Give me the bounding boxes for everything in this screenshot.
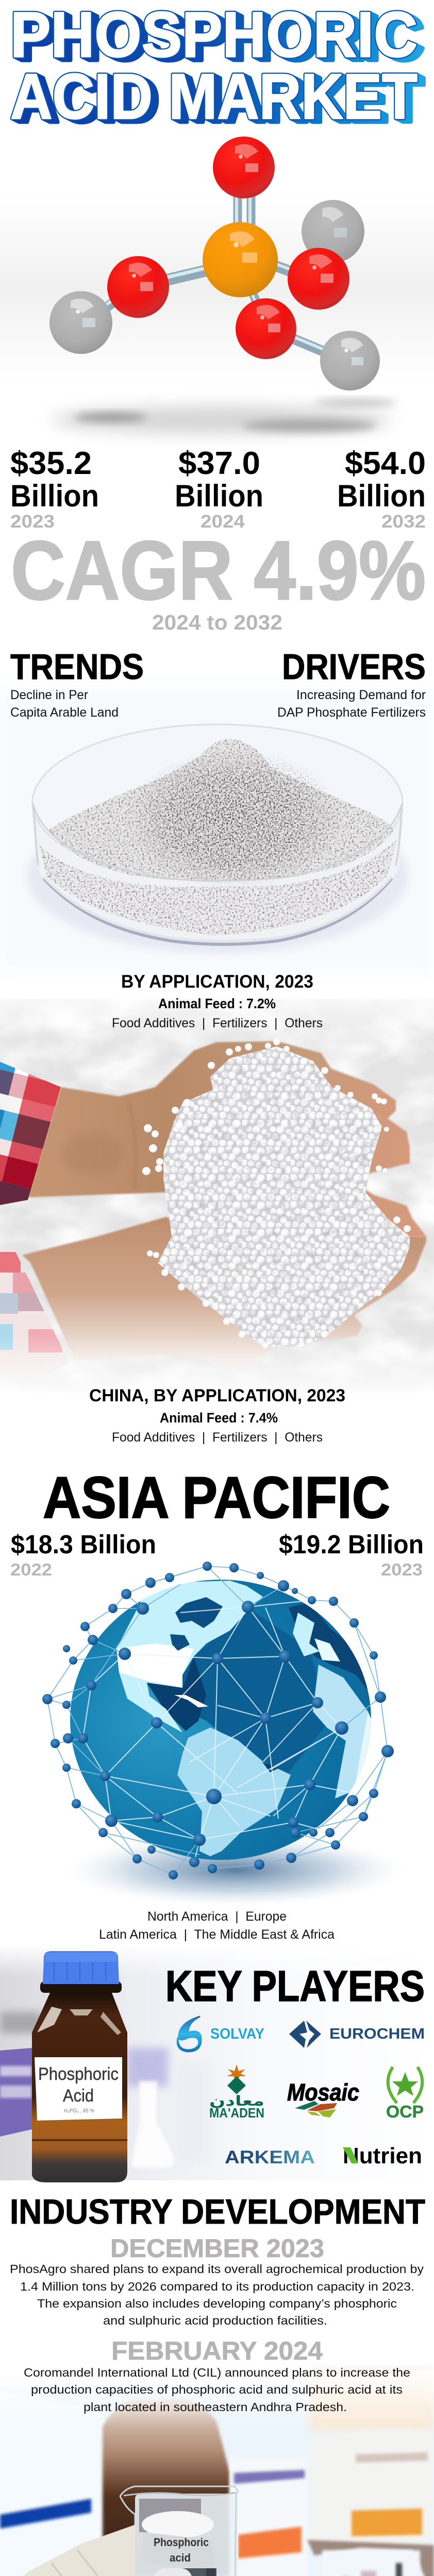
ocean sphere: [70, 1580, 371, 1860]
hydrogen bottom right: [320, 331, 380, 391]
development: february 2024: plant located in southeastern Andhra Pradesh.: [84, 2400, 347, 2414]
other regions list: [99, 1909, 335, 1942]
lower sleeve: [0, 1248, 69, 1366]
molecule shadow: [52, 399, 397, 433]
brown patch below right bottle: [307, 2540, 434, 2576]
market value 2024: $37.0: [178, 446, 260, 481]
soft background band behind molecule: [0, 196, 434, 381]
by application heading: BY APPLICATION, 2023: [121, 972, 313, 992]
soft blue tint behind dish: [0, 685, 434, 974]
development: december 2023: [10, 2234, 424, 2327]
by application heading: Food Additives | Fertilizers | Others: [112, 1016, 323, 1030]
powder mound: [49, 739, 394, 881]
photo background: [0, 999, 434, 1393]
key players lab photo: [0, 1945, 434, 2182]
beaker: Phosphoric: [154, 2536, 209, 2549]
market value 2024: [175, 446, 263, 532]
asia pacific 2023 value: [279, 1530, 424, 1579]
caribbean: [174, 1695, 208, 1707]
title: PHOSPHORIC: [10, 0, 418, 71]
market value 2023: 2023: [10, 512, 55, 532]
china by application heading: CHINA, BY APPLICATION, 2023: [89, 1386, 345, 1405]
beaker: acid: [170, 2551, 191, 2564]
bottle label: H₃PO₄ , 85 %: [64, 2108, 94, 2114]
development: december 2023: PhosAgro shared plans to expand its overall agrochemical production by: [10, 2262, 424, 2276]
upper sleeve: [0, 1062, 61, 1205]
dish back rim: [32, 724, 403, 881]
development: december 2023: DECEMBER 2023: [110, 2234, 324, 2263]
logo: nutrien: Nutrien: [343, 2143, 422, 2168]
granule pile: [158, 1046, 410, 1347]
title: [10, 0, 418, 132]
phosphorus center: [203, 222, 278, 297]
left white bottle: [0, 2391, 111, 2576]
petri dish with white powder: [27, 724, 408, 953]
oxygen left: [107, 256, 169, 318]
inner network lines: [83, 1600, 353, 1862]
dish base: [32, 803, 403, 945]
development: february 2024: [24, 2336, 410, 2414]
logo: eurochem: [289, 2021, 425, 2048]
development: february 2024: Coromandel International Ltd (CIL) announced plans to increase the: [24, 2366, 410, 2379]
fade from text area: [0, 2370, 434, 2427]
development: december 2023: and sulphuric acid production facilities.: [103, 2314, 327, 2327]
bottle: [32, 1951, 127, 2182]
powder in wall: [39, 840, 397, 936]
logo: solvay: SOLVAY: [210, 2026, 264, 2042]
trends: Capita Arable Land: [10, 705, 119, 720]
by application heading: [112, 972, 323, 1030]
trends: Decline in Per: [10, 688, 88, 702]
trends: [10, 647, 144, 720]
logo: ocp: OCP: [386, 2102, 424, 2121]
pile texture: [158, 1046, 410, 1347]
bonds: [105, 196, 326, 352]
asia pacific 2022 value: [10, 1530, 156, 1579]
market value 2023: $35.2: [10, 446, 92, 481]
logo: maaden: [209, 2064, 264, 2121]
china by application heading: Food Additives | Fertilizers | Others: [112, 1430, 323, 1445]
market value 2024: 2024: [201, 512, 245, 532]
logo: ocp: [386, 2067, 424, 2121]
development: december 2023: The expansion also includes developing company’s phosphoric: [37, 2297, 397, 2310]
asia pacific 2023 value: $19.2 Billion: [279, 1530, 424, 1559]
asia pacific 2022 value: $18.3 Billion: [11, 1530, 156, 1559]
CAGR figure: 2024 to 2032: [152, 611, 282, 634]
middle white bottle: [230, 2458, 307, 2576]
phosphoric acid molecule: [49, 137, 380, 391]
logo: mosaic: Mosaic: [287, 2079, 359, 2106]
bottle label: [35, 2057, 122, 2121]
market value 2032: [337, 446, 426, 532]
lab beaker photo: [0, 2370, 434, 2576]
asia pacific heading: ASIA PACIFIC: [43, 1465, 390, 1531]
drivers: DAP Phosphate Fertilizers: [277, 705, 426, 720]
by application heading: Animal Feed : 7.2%: [158, 996, 276, 1011]
dish front rim: [33, 804, 402, 881]
other regions list: North America | Europe: [147, 1909, 287, 1924]
logo: arkema: ARKEMA: [225, 2147, 315, 2167]
africa: [313, 1665, 374, 1799]
development: february 2024: FEBRUARY 2024: [111, 2336, 323, 2365]
hydrogen left: [49, 291, 112, 354]
oxygen right: [288, 248, 349, 310]
logo: maaden: معادن: [209, 2093, 264, 2109]
other regions list: Latin America | The Middle East & Africa: [99, 1927, 335, 1942]
hand holding granules photo: [0, 999, 434, 1393]
north america: [116, 1581, 263, 1733]
asia pacific 2022 value: 2022: [10, 1560, 52, 1579]
photo background: [0, 1945, 434, 2180]
market value 2023: [10, 446, 99, 532]
globe with network: [42, 1562, 405, 1906]
development: december 2023: 1.4 Million tons by 2026 compared to its production capacity in 2023.: [20, 2280, 414, 2293]
market value 2032: Billion: [337, 479, 426, 513]
market value 2023: Billion: [10, 479, 99, 513]
title: PHOSPHORIC: [10, 0, 418, 71]
oxygen bottom: [236, 298, 296, 359]
right white bottle: [309, 2370, 434, 2432]
market value 2032: 2032: [381, 512, 426, 532]
upper hand: [28, 1041, 426, 1236]
china by application heading: Animal Feed : 7.4%: [160, 1410, 278, 1426]
drivers: [277, 647, 426, 720]
china by application heading: [89, 1386, 345, 1445]
logo: eurochem: EUROCHEM: [329, 2026, 425, 2042]
dish shadow: [27, 799, 408, 953]
lower hand: [22, 1217, 426, 1368]
north atlantic darker water: [155, 1607, 330, 1772]
oxygen top: [213, 137, 275, 198]
gloved hand: [0, 2524, 216, 2576]
bottle label: Phosphoric: [38, 2064, 119, 2084]
outer network lines: [47, 1566, 388, 1875]
bottle label: Acid: [63, 2086, 94, 2106]
foreground packets: [322, 2550, 420, 2576]
development: february 2024: production capacities of phosphoric acid and sulphuric acid at its: [31, 2383, 403, 2396]
beaker: [120, 2486, 238, 2576]
asia pacific 2023 value: 2023: [381, 1560, 423, 1579]
logo: mosaic: [287, 2079, 359, 2117]
trends: TRENDS: [10, 647, 144, 687]
drivers: Increasing Demand for: [296, 688, 426, 702]
south america: [177, 1727, 291, 1856]
europe landmass: [289, 1602, 371, 1695]
hydrogen back: [302, 200, 364, 265]
market value 2024: Billion: [175, 479, 263, 513]
scattered granules: [142, 1038, 411, 1349]
brown back bottle: [103, 2398, 230, 2576]
background flask: [131, 2081, 176, 2169]
globe shadow: [65, 1834, 405, 1906]
logo: maaden: MA'ADEN: [209, 2105, 264, 2121]
title: PHOSPHORIC: [10, 0, 418, 71]
logo: solvay: [177, 2016, 264, 2052]
market value 2032: $54.0: [345, 446, 426, 481]
network nodes: [42, 1562, 394, 1879]
